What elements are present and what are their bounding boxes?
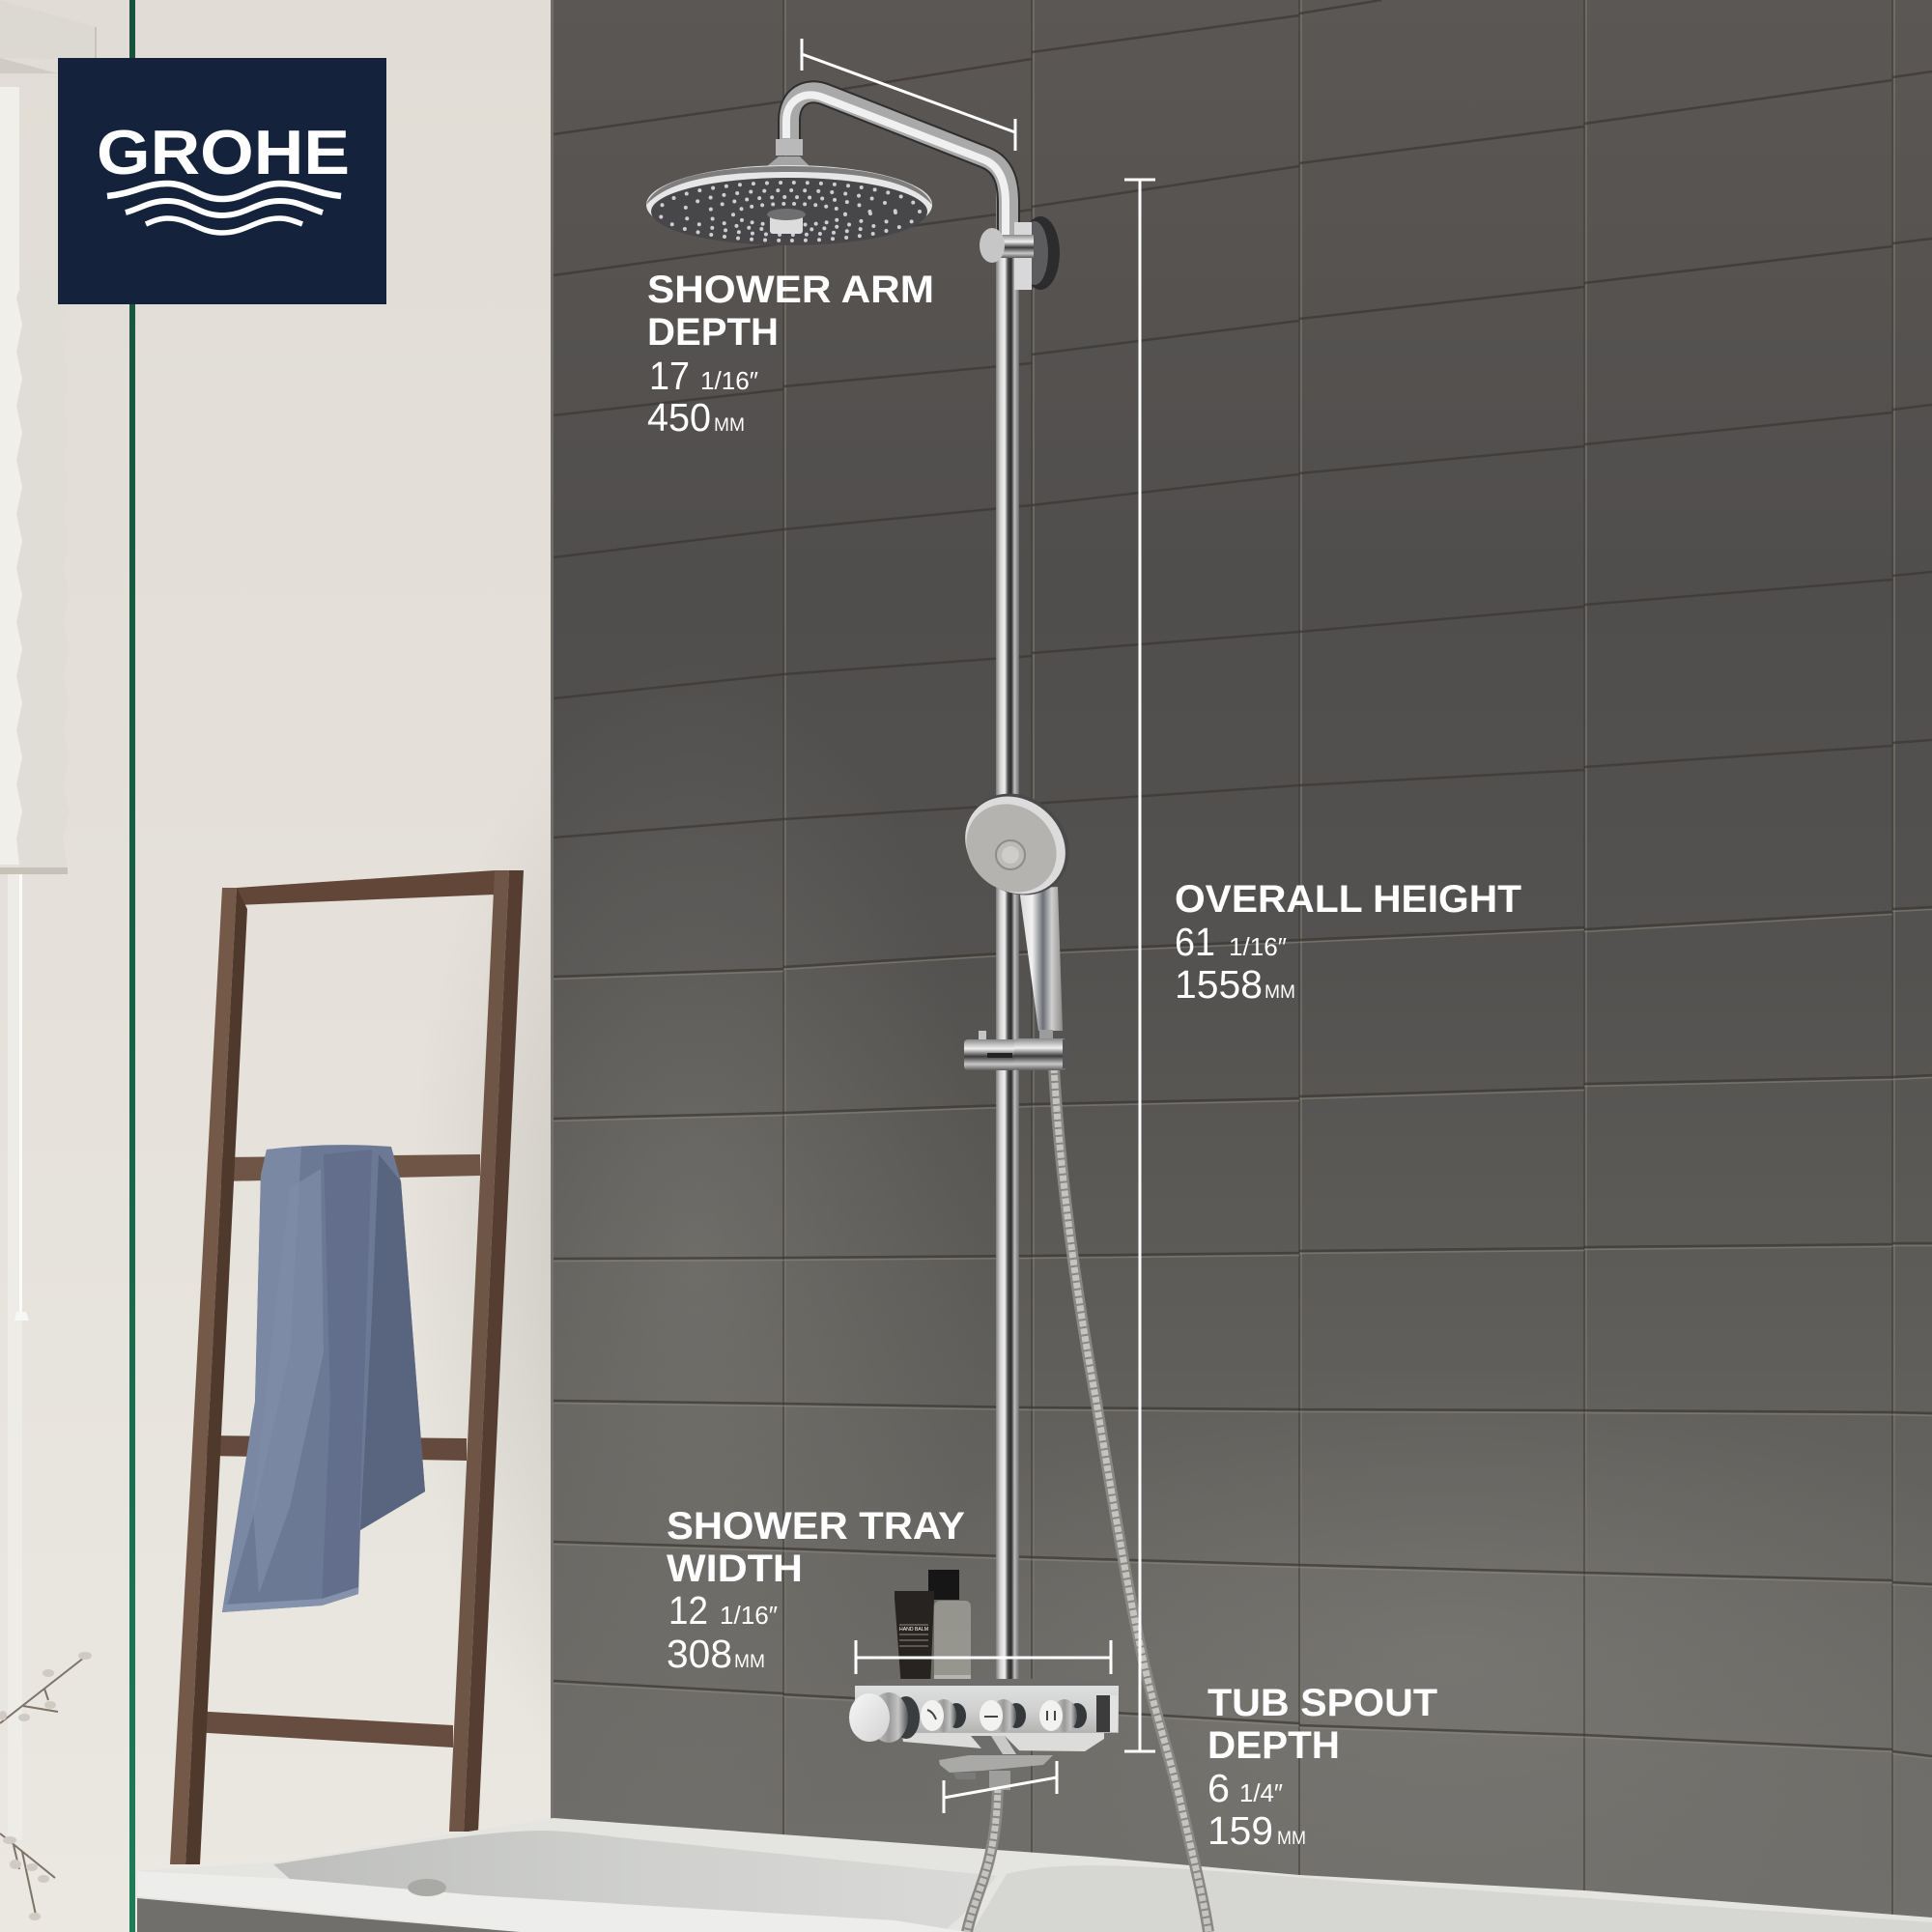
logo: GROHE: GROHE xyxy=(97,117,350,187)
label: tub spout depth: 1/4″ xyxy=(1239,1778,1283,1807)
hand shower hose xyxy=(1054,1067,1208,1932)
wooden towel ladder xyxy=(170,870,524,1864)
label: shower tray width: 1/16″ xyxy=(720,1601,778,1630)
shower arm xyxy=(786,92,1009,242)
tub spout xyxy=(939,1736,1053,1790)
label: shower arm depth xyxy=(647,269,934,440)
window with pleated blind and cord xyxy=(0,0,97,1840)
shower head nozzles xyxy=(659,183,920,241)
lower hose under spout xyxy=(967,1787,998,1932)
tiled wall xyxy=(406,0,1932,1932)
label: tub spout depth: MM xyxy=(1277,1829,1306,1849)
dimension line: shower tray width xyxy=(856,1640,1111,1674)
thermostat shelf with controls xyxy=(849,1679,1119,1751)
tube on shelf: HAND BALM xyxy=(899,1627,928,1633)
logo: GROHE xyxy=(58,58,386,304)
tile grout lines xyxy=(554,0,1932,1915)
label: overall height: 61 xyxy=(1175,920,1215,964)
function buttons xyxy=(947,1703,966,1728)
label: shower tray width: 12 xyxy=(668,1588,708,1633)
label: shower arm depth: MM xyxy=(714,415,745,436)
label: tub spout depth: TUB SPOUT xyxy=(1208,1682,1437,1724)
label: overall height: 1558 xyxy=(1175,962,1263,1007)
label: overall height: 1/16″ xyxy=(1229,932,1287,961)
label: shower arm depth: 1/16″ xyxy=(700,366,758,395)
label: shower tray width: SHOWER TRAY xyxy=(667,1505,965,1548)
hand shower xyxy=(945,773,1090,1031)
label: shower tray width: WIDTH xyxy=(667,1548,803,1590)
label: shower arm depth: DEPTH xyxy=(647,311,779,354)
label: shower arm depth: 17 xyxy=(649,354,690,398)
label: tub spout depth: 6 xyxy=(1208,1766,1230,1810)
dimension line: tub spout depth xyxy=(944,1761,1057,1813)
rain shower head xyxy=(646,139,932,245)
label: shower arm depth: 450 xyxy=(647,395,711,440)
label: tub spout depth: 159 xyxy=(1208,1808,1273,1853)
label: shower arm depth: SHOWER ARM xyxy=(647,269,934,311)
willow twigs xyxy=(0,1652,92,1920)
label: overall height xyxy=(1175,878,1521,1007)
label: shower tray width: MM xyxy=(734,1652,765,1672)
label: overall height: MM xyxy=(1264,982,1295,1003)
room background wall xyxy=(0,0,554,1932)
riser rail xyxy=(996,184,1019,1690)
blue towel on ladder xyxy=(222,1145,425,1612)
label: overall height: OVERALL HEIGHT xyxy=(1175,878,1521,921)
label: tub spout depth xyxy=(1208,1682,1437,1853)
wall bracket xyxy=(980,216,1060,290)
dimension line: overall height xyxy=(1124,180,1155,1751)
glass panel edge (green line) xyxy=(129,0,135,1932)
bathtub xyxy=(137,1818,1932,1932)
temperature knob xyxy=(893,1696,920,1739)
label: tub spout depth: DEPTH xyxy=(1208,1724,1340,1767)
label: shower tray width: 308 xyxy=(667,1632,732,1676)
bottle on shelf xyxy=(928,1570,971,1689)
tub basin xyxy=(273,1831,997,1932)
label: shower tray width xyxy=(667,1505,965,1676)
hand shower slider xyxy=(964,1030,1070,1070)
tube on shelf xyxy=(895,1591,934,1688)
dimension line: shower arm depth xyxy=(802,39,1015,151)
